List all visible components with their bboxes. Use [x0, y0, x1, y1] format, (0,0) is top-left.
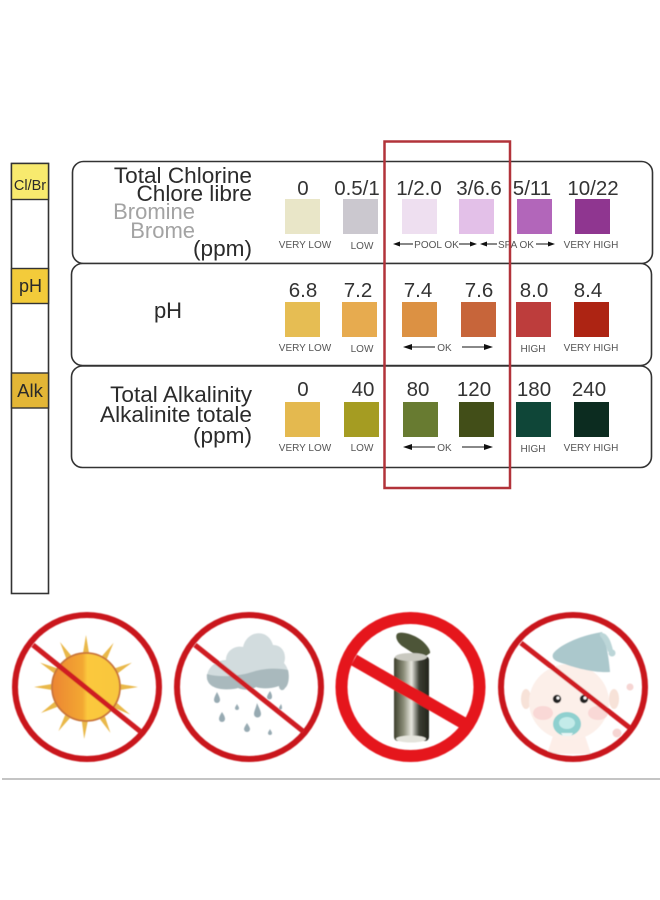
panel: chlorine and bromine [72, 162, 652, 264]
pH values: 8.0 [520, 279, 548, 302]
heading: chlorine and bromine: Brome [130, 218, 195, 243]
arrows: alkalinity ok [403, 443, 493, 454]
pad: Alk: Alk [17, 380, 44, 401]
prohibition sign [342, 618, 480, 756]
pad: Alk [12, 373, 48, 408]
chlorine values: 0.5/1 [334, 177, 380, 200]
prohibition sign [15, 615, 159, 759]
pH range labels: VERY LOW [279, 343, 332, 354]
test strip [12, 164, 48, 594]
pacifier [553, 712, 581, 736]
icon: no sunlight [15, 615, 159, 759]
pH values: 7.6 [465, 279, 493, 302]
alkalinity colour swatches [285, 402, 609, 437]
pH values: 7.2 [344, 279, 372, 302]
alkalinity values: 180 [517, 378, 551, 401]
heading: total alkalinity: (ppm) [193, 423, 252, 448]
pad: pH [12, 268, 48, 304]
alkalinity range labels: LOW [351, 443, 374, 454]
alkalinity range labels: VERY HIGH [564, 443, 618, 454]
heading: chlorine and bromine: Chlore libre [136, 181, 252, 206]
arrows: pool ok and spa ok: SPA OK [498, 240, 534, 251]
panel: total alkalinity [72, 366, 652, 468]
chlorine range labels: VERY HIGH [564, 240, 618, 251]
pH values: 7.4 [404, 279, 432, 302]
alkalinity values [297, 378, 606, 401]
baby face [521, 664, 619, 754]
arrows: pool ok and spa ok: POOL OK [414, 240, 459, 251]
chlorine values: 10/22 [567, 177, 619, 200]
arrows: pH ok [403, 343, 493, 354]
chlorine values: 1/2.0 [396, 177, 442, 200]
heading: chlorine and bromine: Bromine [113, 199, 195, 224]
chlorine values [297, 177, 619, 200]
red highlight box: ideal range [384, 142, 510, 488]
pH range labels: HIGH [520, 344, 546, 355]
icon: keep away from children [501, 615, 645, 759]
prohibition sign [177, 615, 321, 759]
alkalinity values: 40 [352, 378, 374, 401]
pH values: 8.4 [574, 279, 602, 302]
pad: Cl/Br [12, 164, 48, 200]
heading: chlorine and bromine: Total Chlorine [114, 163, 252, 188]
raindrops [214, 691, 282, 735]
sun disc [52, 653, 120, 721]
alkalinity values: 120 [457, 378, 491, 401]
arrows: alkalinity ok: OK [437, 443, 452, 454]
alkalinity values: 0 [297, 378, 309, 401]
chlorine values: 5/11 [513, 177, 551, 200]
heading: chlorine and bromine [113, 163, 252, 261]
prohibition sign [501, 615, 645, 759]
heading: total alkalinity: Total Alkalinity [110, 382, 253, 407]
pH range labels: LOW [351, 344, 374, 355]
rain cloud [207, 633, 289, 690]
heading: pH: pH [154, 298, 182, 323]
sun rays [34, 635, 138, 739]
pH range labels: VERY HIGH [564, 343, 618, 354]
pH values [289, 279, 602, 302]
heading: total alkalinity [100, 382, 253, 448]
heading: total alkalinity: Alkalinite totale [100, 402, 252, 427]
alkalinity values: 240 [572, 378, 606, 401]
pad: Cl/Br: Cl/Br [14, 178, 46, 194]
icon: no rain [177, 615, 321, 759]
arrows: pH ok: OK [437, 343, 452, 354]
alkalinity values: 80 [407, 378, 429, 401]
baby hat [553, 632, 616, 672]
alkalinity range labels: HIGH [520, 444, 546, 455]
test strip bottle [394, 633, 430, 742]
skin spots [612, 684, 634, 738]
chlorine range labels: LOW [351, 241, 374, 252]
arrows: pool ok and spa ok [393, 240, 555, 251]
chlorine colour swatches [285, 199, 610, 234]
pH values: 6.8 [289, 279, 317, 302]
chlorine values: 0 [297, 177, 309, 200]
alkalinity range labels [279, 443, 618, 455]
chlorine range labels [279, 240, 618, 252]
chlorine range labels: VERY LOW [279, 240, 332, 251]
panel: pH [72, 264, 652, 366]
pad: pH: pH [19, 276, 42, 296]
alkalinity range labels: VERY LOW [279, 443, 332, 454]
pH colour swatches [285, 302, 609, 337]
icon: keep away from open container [342, 618, 480, 756]
pH range labels [279, 343, 618, 355]
heading: chlorine and bromine: (ppm) [193, 236, 252, 261]
chlorine values: 3/6.6 [456, 177, 502, 200]
